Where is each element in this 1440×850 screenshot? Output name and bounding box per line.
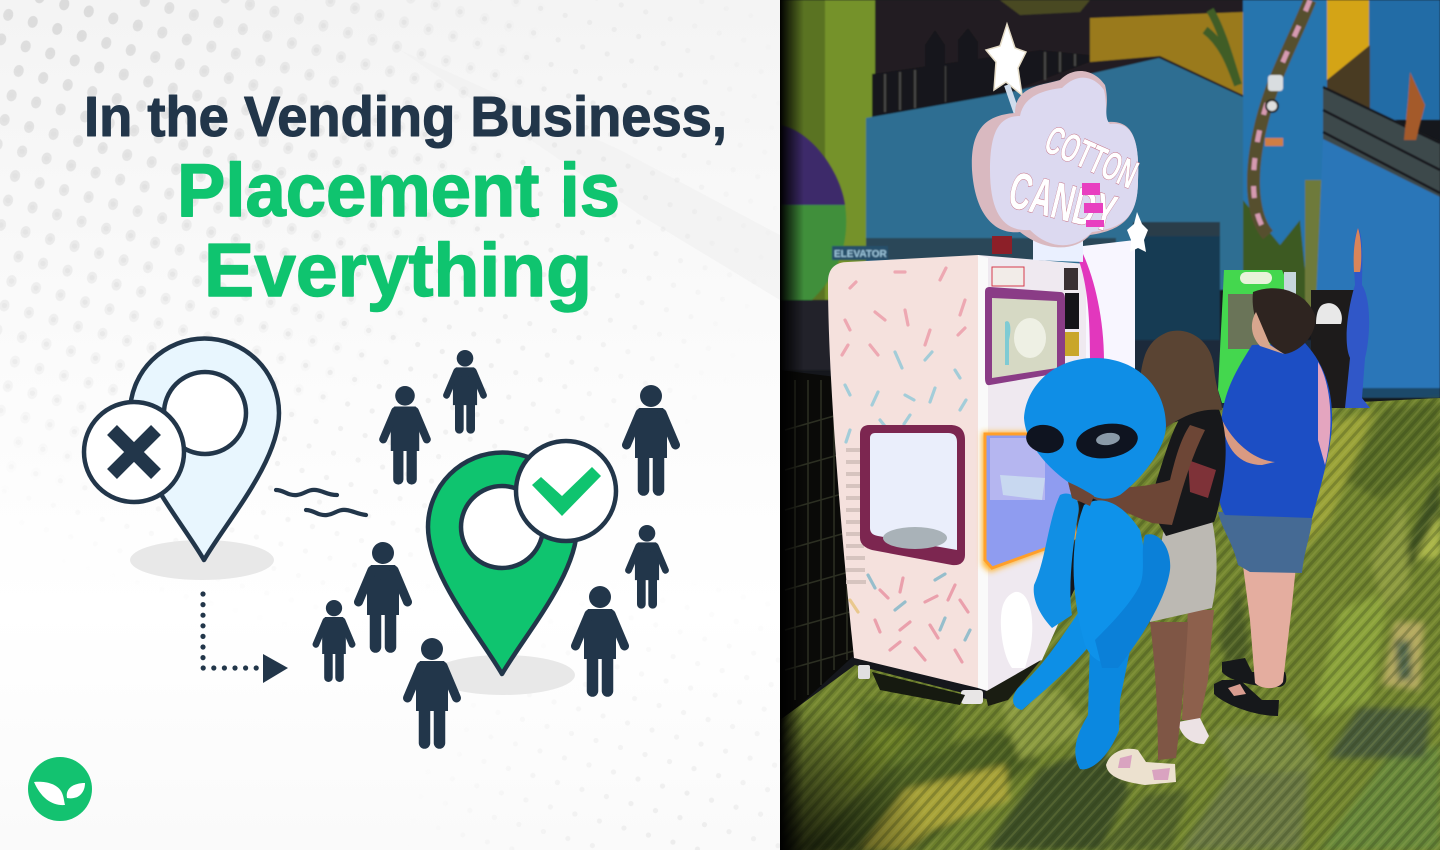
blue inflatable alien [1013, 358, 1170, 769]
illustration: bad location pin [84, 339, 279, 580]
floor carpet [780, 398, 1440, 850]
badge: X [84, 402, 184, 502]
pin hole [164, 372, 246, 454]
person [316, 600, 352, 678]
black cabinet [1311, 290, 1358, 408]
person [626, 385, 676, 490]
arm [1068, 425, 1205, 525]
blue shirt [1217, 343, 1332, 518]
side window [860, 425, 965, 565]
vents [846, 450, 866, 582]
child's hand [1068, 482, 1094, 506]
panel: left background [0, 0, 780, 850]
right leg [1075, 640, 1132, 769]
vending machine [828, 236, 1135, 706]
star [1127, 212, 1148, 252]
hair [1140, 331, 1222, 440]
head [1024, 358, 1166, 499]
left leg [1013, 610, 1094, 710]
pin shadow [130, 540, 274, 580]
fence at left [788, 372, 854, 711]
touch screen [985, 287, 1065, 385]
star [986, 24, 1026, 95]
background left ball sculpture [780, 125, 888, 370]
dotted arrow [203, 594, 288, 683]
legs [1243, 566, 1296, 688]
squiggle lines [276, 490, 366, 515]
far leg [1182, 610, 1214, 720]
cloud face [990, 78, 1138, 245]
badge: check mark [516, 441, 616, 541]
left eye [1024, 422, 1066, 456]
child with shorts [1068, 331, 1226, 785]
back sandal [1222, 658, 1286, 687]
person [358, 542, 408, 647]
person [629, 525, 665, 604]
background walls and balcony [780, 0, 1440, 420]
green arcade machine [1218, 228, 1370, 408]
black shirt [1148, 404, 1226, 536]
yellow alcove and right wall [1327, 0, 1370, 90]
front panel [978, 255, 1086, 692]
side panel with sprinkles [828, 255, 978, 688]
sign word: cotton: COTTON [1038, 118, 1144, 197]
wheels [858, 665, 870, 679]
right eye [1074, 420, 1140, 462]
body [1074, 500, 1145, 663]
vignette [780, 0, 930, 850]
person [447, 350, 483, 429]
title line: dark: In the Vending Business, [84, 85, 727, 149]
title [84, 85, 727, 312]
dark area behind people [1133, 340, 1323, 420]
column with palm mural [1243, 0, 1327, 300]
sticker and ad panels [992, 267, 1024, 286]
far shoe [1178, 718, 1209, 744]
photo base fill [782, 0, 1440, 718]
blue toy display [1345, 228, 1370, 408]
right arm [1095, 534, 1170, 668]
illustration: good location pin [428, 441, 616, 695]
front sandal [1214, 680, 1279, 716]
green map pin [428, 452, 577, 674]
title line: green one: Placement is [177, 148, 620, 232]
pin shadow [431, 655, 575, 695]
cotton candy cloud sign [972, 24, 1148, 252]
candy sprinkles [842, 268, 970, 662]
left arm [1034, 494, 1079, 628]
woman in blue shirt [1214, 288, 1332, 716]
crowd of people [316, 350, 676, 743]
pin hole [461, 486, 543, 568]
denim shorts [1218, 512, 1312, 573]
cloud back [972, 71, 1138, 247]
panel: photo of cotton candy vending machine [780, 0, 1440, 850]
person [408, 638, 456, 743]
hair [1253, 288, 1315, 354]
sign word: candy: CANDY [1003, 161, 1122, 244]
background left ball sculpture: ELEVATOR [834, 249, 888, 260]
light blue map pin [130, 339, 279, 560]
patterned clog [1106, 749, 1176, 785]
person [576, 586, 624, 691]
blue upper wall [866, 58, 1245, 290]
icon: leaf logo [28, 757, 92, 821]
title line: green two: Everything [204, 228, 592, 312]
sign pillar [1083, 240, 1135, 369]
front glass window with neon [982, 432, 1075, 572]
near leg [1150, 622, 1188, 760]
cotton candy glow graphic [1001, 592, 1032, 668]
sign text [1010, 127, 1140, 231]
grey shorts [1150, 520, 1217, 622]
person [383, 386, 427, 479]
